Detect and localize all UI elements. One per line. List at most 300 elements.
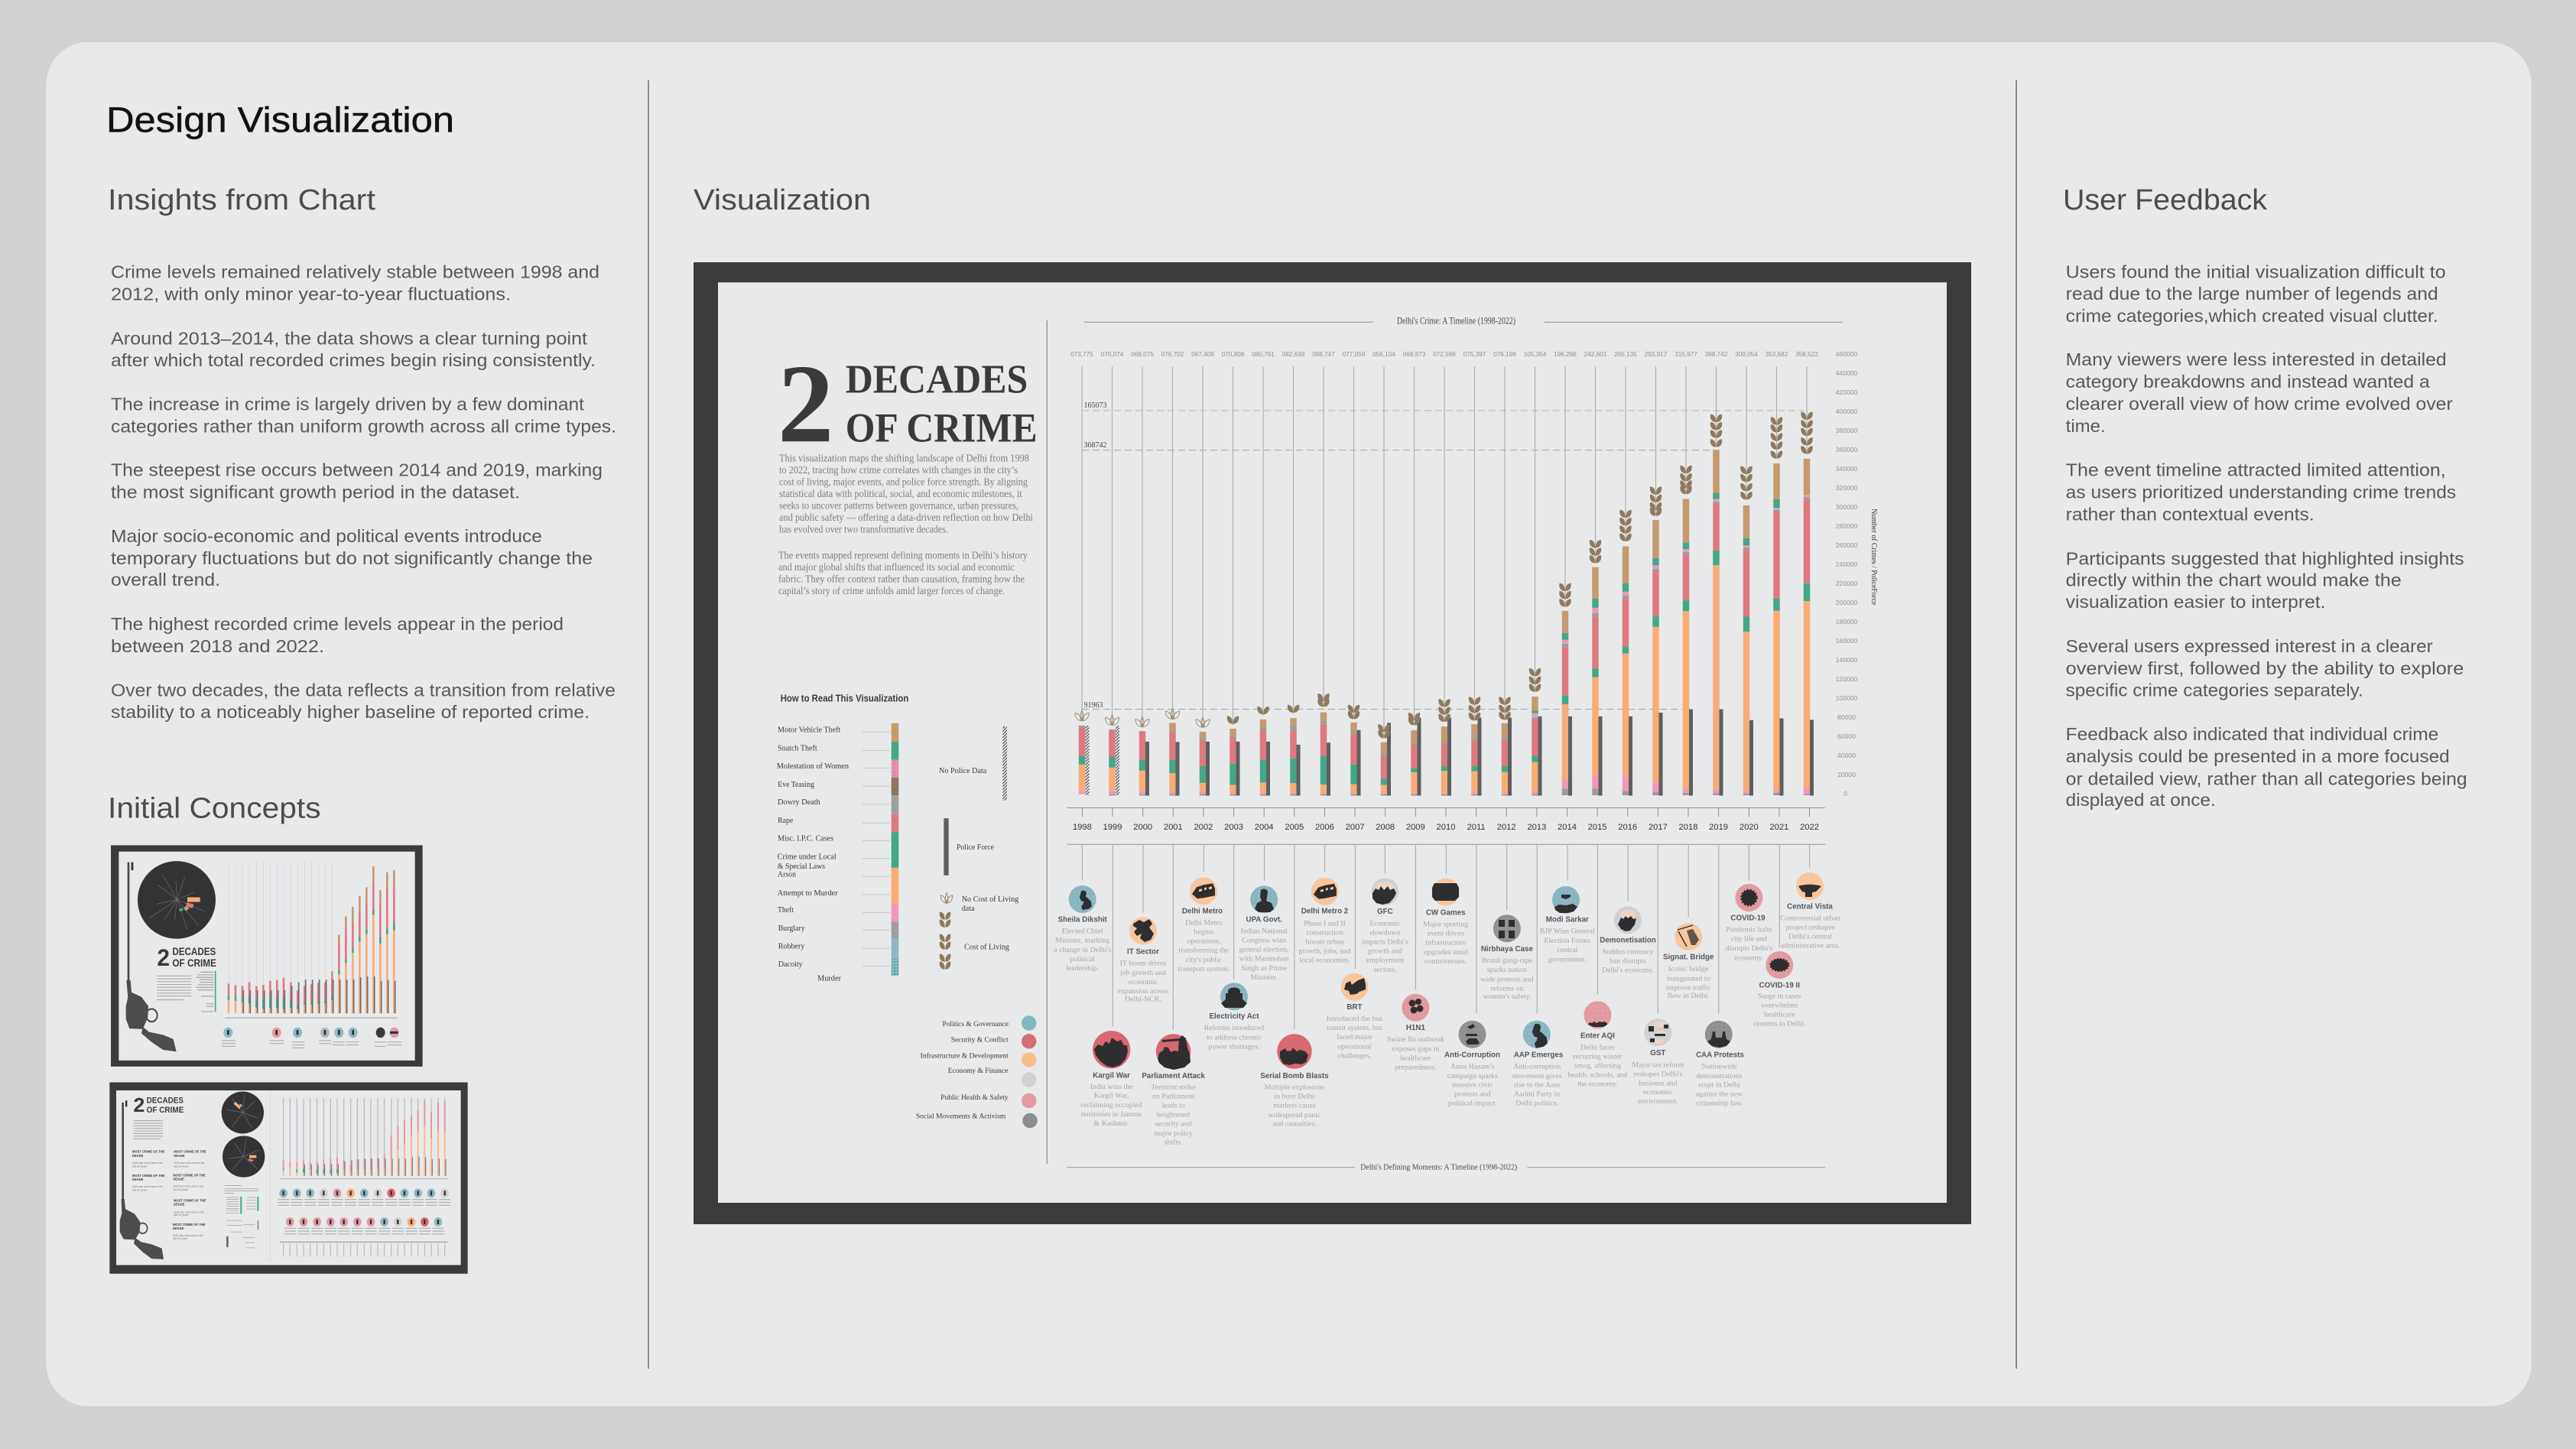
- event: Signature Bridge: flow in Delhi.: [1668, 992, 1710, 1000]
- event: UPA Govt.: Congress wins: [1242, 937, 1286, 945]
- event: Demonetisation: [1600, 844, 1656, 975]
- event: Parliament Attack: [1142, 844, 1205, 1147]
- text block: feedback: Many viewers were less interested in detailed: [2066, 349, 2447, 369]
- event: Sheila Dikshit: a change in Delhi's: [1054, 946, 1111, 954]
- event: Delhi Metro 2: Phase I and II: [1304, 919, 1346, 928]
- text block: insights: overall trend.: [111, 570, 220, 590]
- event: Anti-Corruption: campaign sparks: [1447, 1072, 1498, 1080]
- chart: total crime labels: [1070, 351, 1818, 358]
- event: AAP Emerges: rise to the Aam: [1514, 1081, 1561, 1090]
- thumbnail: second concept: [109, 1082, 468, 1274]
- x axis: years: 2002: [1194, 823, 1213, 832]
- event: Anti-Corruption: protests and: [1454, 1090, 1491, 1099]
- event: CW Games: Major sporting: [1423, 921, 1468, 929]
- event: Delhi Metro 2: [1298, 844, 1351, 965]
- text block: introduction: to 2022, tracing how crime correlates with changes in the city’s: [779, 464, 1018, 476]
- event: Central Vista: administrative area.: [1781, 942, 1840, 950]
- event: Demonetisation: Sudden currency: [1603, 948, 1653, 957]
- chart: total crime labels: 368,742: [1705, 351, 1728, 358]
- thumbnail: second concept: 2020 saw most crime in the: [173, 1184, 204, 1188]
- event: Delhi Metro: Delhi Metro: [1182, 907, 1223, 915]
- event: Modi Sarkar: Election Forms: [1544, 937, 1590, 945]
- timeline: events: [1054, 844, 1840, 1147]
- heading: user feedback: User Feedback: [2063, 184, 2268, 216]
- thumbnail: first concept: 2: [157, 945, 170, 972]
- chart: y axis: 220000: [1836, 580, 1858, 587]
- text block: feedback: category breakdowns and instead wanted a: [2066, 372, 2431, 391]
- text block: feedback: analysis could be presented in a more focused: [2066, 746, 2450, 766]
- chart: total crime labels: 076,702: [1161, 351, 1184, 358]
- event: GFC: growth and: [1368, 947, 1402, 956]
- chart: total crime labels: 077,059: [1343, 351, 1366, 358]
- thumbnail: second concept: 2020 saw most crime in the: [174, 1210, 204, 1213]
- infographic title: 2: [778, 341, 833, 466]
- legend: no police data: [939, 726, 1007, 801]
- event: Signature Bridge: [1663, 844, 1714, 1000]
- x axis: years: 2011: [1467, 823, 1486, 832]
- event: Sheila Dikshit: Minister, marking: [1055, 937, 1109, 945]
- text block: introduction: capital’s story of crime unfolds amid larger forces of change.: [778, 585, 1005, 596]
- legend labels: crime categories: Arson: [778, 871, 797, 879]
- event: Anti-Corruption: massive civic: [1452, 1081, 1493, 1090]
- legend labels: crime categories: Motor Vehicle Theft: [778, 726, 840, 735]
- chart: y axis: 160000: [1836, 637, 1858, 645]
- text block: feedback: specific crime categories separately.: [2066, 681, 2363, 700]
- heading: initial concepts: Initial Concepts: [108, 793, 321, 825]
- chart: reference lines: [1082, 401, 1804, 710]
- chart: total crime labels: 242,601: [1584, 351, 1607, 358]
- chart: total crime labels: 070,074: [1101, 351, 1124, 358]
- chart: reference lines: 368742: [1084, 441, 1107, 450]
- legend: cost of living: [940, 912, 1010, 970]
- legend labels: crime categories: Dowry Death: [778, 798, 820, 807]
- legend labels: crime categories: & Special Laws: [778, 863, 825, 871]
- text block: insights: temporary fluctuations but do not significantly change the: [111, 548, 593, 568]
- event: GFC: sectors.: [1373, 966, 1396, 974]
- event: Kargil War: India wins the: [1090, 1083, 1133, 1091]
- event: COVID-19: economy.: [1734, 954, 1763, 962]
- chart: total crime labels: 072,596: [1433, 351, 1456, 358]
- text block: insights: after which total recorded crimes begin rising consistently.: [111, 350, 596, 370]
- thumbnail: second concept: DEADE: [132, 1154, 143, 1158]
- event: Enter AQI: Delhi faces: [1580, 1043, 1615, 1051]
- thumbnail: second concept: DEADE: [132, 1178, 143, 1181]
- event: Sheila Dikshit: political: [1070, 955, 1095, 963]
- text block: feedback: Users found the initial visualization difficult to: [2066, 262, 2446, 281]
- chart: reference lines: 165073: [1084, 401, 1107, 410]
- event: Electricity Act: Reforms introduced: [1204, 1024, 1264, 1032]
- text block: introduction: fabric. They offer context rather than causation, framing how the: [778, 573, 1025, 584]
- legend labels: crime categories: Eve Teasing: [778, 781, 815, 789]
- event: GST: [1632, 844, 1684, 1106]
- x axis: years: 2016: [1618, 823, 1637, 832]
- chart: y axis: 0: [1843, 790, 1847, 798]
- event: GFC: impacts Delhi's: [1362, 937, 1408, 946]
- thumbnail: second concept: MOST CRIME OF THE: [174, 1198, 206, 1203]
- infographic title: DECADES: [846, 357, 1028, 401]
- event: Delhi Metro 2: construction: [1306, 929, 1343, 937]
- event: Parliament Attack: Parliament Attack: [1142, 1072, 1205, 1080]
- event: UPA Govt.: UPA Govt.: [1246, 916, 1282, 924]
- thumbnail: second concept: DEADE: [173, 1226, 184, 1230]
- event: Anti-Corruption: political impact.: [1448, 1099, 1497, 1107]
- legend: event categories: Infrastructure & Development: [921, 1052, 1009, 1061]
- event: Delhi Metro 2: boosts urban: [1305, 937, 1344, 946]
- event: COVID-19 II: systems in Delhi.: [1753, 1020, 1805, 1028]
- x axis: years: 1999: [1103, 823, 1122, 832]
- legend: no cost of living: No Cost of Living: [962, 895, 1019, 904]
- chart: total crime labels: 080,761: [1252, 351, 1275, 358]
- thumbnail: second concept: MOST CRIME OF THE: [174, 1149, 206, 1154]
- text block: feedback: time.: [2066, 416, 2106, 436]
- event: GFC: [1362, 844, 1408, 974]
- event: Nirbhaya Case: women's safety.: [1483, 993, 1531, 1001]
- event: BRT: [1327, 844, 1382, 1060]
- thumbnail: second concept: MOST CRIME OF THE: [173, 1173, 206, 1178]
- event: BRT: BRT: [1346, 1003, 1362, 1012]
- event: CW Games: infrastructure: [1425, 939, 1467, 947]
- text block: introduction: and major global shifts that influenced its social and economic: [778, 561, 1015, 573]
- event: COVID-19 II: COVID-19 II: [1759, 982, 1800, 990]
- legend: how to read: [777, 693, 1038, 1128]
- legend labels: crime categories: Burglary: [778, 924, 805, 933]
- event: UPA Govt.: Minister.: [1251, 973, 1278, 982]
- thumbnail: second concept: DEADE: [174, 1154, 185, 1158]
- event: Nirbhaya Case: reforms on: [1490, 984, 1523, 993]
- event: IT Sector: IT Sector: [1127, 948, 1159, 957]
- event: AAP Emerges: Delhi politics.: [1515, 1099, 1558, 1107]
- event: H1N1: [1387, 844, 1444, 1071]
- chart: y axis: 200000: [1836, 599, 1858, 606]
- chart: reference lines: 91963: [1084, 701, 1103, 710]
- event: Serial Bomb Blasts: [1260, 844, 1329, 1129]
- thumbnail: second concept: last 20 years: [173, 1237, 188, 1240]
- text block: feedback: displayed at once.: [2066, 790, 2216, 810]
- legend: event categories: [916, 1015, 1038, 1128]
- event: AAP Emerges: Aadmi Party in: [1514, 1090, 1560, 1098]
- bars: no police data hatching: [1086, 726, 1119, 795]
- text block: insights: The steepest rise occurs between 2014 and 2019, marking: [111, 460, 603, 480]
- chart: y axis: 40000: [1837, 752, 1856, 759]
- text block: feedback: read due to the large number of legends and: [2066, 284, 2438, 304]
- chart: y axis: 420000: [1836, 388, 1858, 396]
- legend: no cost of living: [940, 893, 1019, 913]
- event: AAP Emerges: [1512, 844, 1564, 1107]
- event: Parliament Attack: Terrorist strike: [1151, 1084, 1196, 1092]
- text block: insights: categories rather than uniform growth across all crime types.: [111, 416, 616, 436]
- chart: total crime labels: 309,054: [1735, 351, 1758, 358]
- text block: insights: The increase in crime is largely driven by a few dominant: [111, 395, 584, 414]
- text block: insights: [111, 262, 616, 722]
- event: Electricity Act: Electricity Act: [1210, 1012, 1259, 1021]
- heading: visualization: Visualization: [694, 184, 871, 216]
- event: GST: Major tax reform: [1632, 1061, 1684, 1069]
- event: Delhi Metro: transforming the: [1179, 947, 1230, 955]
- bar segments: pink: [1082, 495, 1807, 794]
- text block: introduction: statistical data with political, social, and economic milestones, it: [779, 488, 1022, 499]
- legend labels: crime categories: Dacoity: [778, 960, 803, 969]
- legend: event categories: Economy & Finance: [948, 1067, 1008, 1075]
- legend labels: crime categories: Murder: [817, 975, 841, 983]
- event: Kargil War: territories in Jammu: [1081, 1110, 1142, 1119]
- chart: total crime labels: 068,075: [1131, 351, 1154, 358]
- event: Modi Sarkar: government.: [1548, 955, 1587, 963]
- chart: y axis: [1836, 350, 1858, 798]
- thumbnail: second concept: last 20 years: [174, 1213, 189, 1217]
- event: Delhi Metro 2: growth, jobs, and: [1298, 947, 1351, 956]
- x axis: years: 2004: [1255, 823, 1274, 832]
- event: Delhi Metro: operations,: [1187, 937, 1220, 946]
- event: Kargil War: Kargil War,: [1094, 1092, 1129, 1100]
- legend: event categories: Politics & Governance: [942, 1021, 1009, 1028]
- event: AAP Emerges: Anti-corruption: [1513, 1063, 1561, 1071]
- event: CAA Protests: erupt in Delhi: [1698, 1081, 1740, 1090]
- event: UPA Govt.: general election,: [1239, 946, 1289, 954]
- chart: y axis: 240000: [1836, 560, 1858, 568]
- text block: feedback: clearer overall view of how crime evolved over: [2066, 394, 2453, 414]
- event: CAA Protests: against the new: [1696, 1090, 1743, 1099]
- event: Nirbhaya Case: sparks nation: [1487, 966, 1527, 974]
- event: Anti-Corruption: Anna Hazare's: [1450, 1063, 1495, 1071]
- chart: y axis: 460000: [1836, 350, 1858, 358]
- event: BRT: faced major: [1337, 1033, 1373, 1041]
- event: COVID-19 II: healthcare: [1764, 1011, 1795, 1019]
- event: CAA Protests: [1696, 844, 1744, 1107]
- chart: y axis: 100000: [1836, 694, 1858, 702]
- x axis: years: 2015: [1588, 823, 1607, 832]
- panel: right column: [2063, 184, 2467, 810]
- event: Demonetisation: ban disrupts: [1610, 957, 1646, 966]
- chart: y axis: 60000: [1837, 733, 1856, 740]
- event: Serial Bomb Blasts: Serial Bomb Blasts: [1260, 1072, 1329, 1080]
- text block: introduction: This visualization maps the shifting landscape of Delhi from 1998: [779, 452, 1029, 463]
- text block: insights: 2012, with only minor year-to-year fluctuations.: [111, 284, 511, 304]
- event: Signature Bridge: inaugurated to: [1667, 974, 1710, 983]
- event: H1N1: preparedness.: [1395, 1063, 1436, 1071]
- event: COVID-19: Pandemic halts: [1726, 926, 1772, 934]
- x axis: years: 2012: [1497, 823, 1516, 832]
- event: Electricity Act: to address chronic: [1207, 1033, 1262, 1041]
- chart: y axis: 120000: [1836, 675, 1858, 683]
- bar segments: gray: [1082, 497, 1807, 795]
- event: Electricity Act: [1204, 844, 1264, 1051]
- x axis: years: 2000: [1133, 823, 1152, 832]
- event: GST: business and: [1639, 1080, 1677, 1088]
- infographic title: [778, 341, 1038, 466]
- chart: total crime labels: 105,354: [1524, 351, 1547, 358]
- text block: feedback: [2066, 262, 2467, 810]
- event: GST: reshapes Delhi's: [1633, 1070, 1682, 1078]
- event: UPA Govt.: [1239, 844, 1289, 982]
- icons: cost of living wheat: [1227, 412, 1813, 738]
- text block: introduction: has evolved over two transformative decades.: [779, 524, 948, 535]
- title: Design Visualization: [106, 100, 454, 140]
- event: Signature Bridge: improve traffic: [1666, 983, 1711, 992]
- event: IT Sector: expansion across: [1117, 987, 1169, 996]
- thumbnail: first concept: DECADES: [172, 945, 216, 957]
- chart: y axis: 180000: [1836, 618, 1858, 625]
- legend heading: How to Read This Visualization: [781, 693, 908, 703]
- chart: y axis: 320000: [1836, 484, 1858, 492]
- chart: total crime labels: 076,198: [1493, 351, 1516, 358]
- thumbnail: second concept: MOST CRIME OF THE: [132, 1149, 164, 1154]
- event: COVID-19: city life and: [1731, 935, 1767, 944]
- thumbnail: second concept: last 20 years: [132, 1188, 148, 1191]
- text block: feedback: visualization easier to interpret.: [2066, 592, 2326, 612]
- event: GST: environment.: [1638, 1097, 1678, 1106]
- event: Nirbhaya Case: wide protests and: [1480, 975, 1534, 983]
- event: Serial Bomb Blasts: Multiple explosions: [1265, 1084, 1324, 1092]
- x axis: years: 2019: [1709, 823, 1728, 832]
- event: Serial Bomb Blasts: widespread panic: [1268, 1111, 1321, 1119]
- bar segments: orange: [1082, 565, 1807, 793]
- event: Nirbhaya Case: [1480, 844, 1534, 1001]
- event: IT Sector: IT boom drives: [1120, 960, 1167, 968]
- event: Central Vista: project reshapes: [1786, 923, 1835, 931]
- event: BRT: challenges.: [1337, 1051, 1371, 1060]
- event: Delhi Metro: begins: [1194, 928, 1213, 937]
- event: CAA Protests: CAA Protests: [1696, 1051, 1744, 1060]
- text block: insights: Major socio-economic and political events introduce: [111, 526, 542, 546]
- text block: feedback: or detailed view, rather than all categories being: [2066, 769, 2467, 789]
- event: Enter AQI: health, schools, and: [1567, 1071, 1627, 1080]
- chart: total crime labels: 358,522: [1795, 351, 1818, 358]
- event: Central Vista: Central Vista: [1787, 902, 1833, 911]
- thumbnail: second concept: MOST CRIME OF THE: [132, 1174, 164, 1178]
- event: Anti-Corruption: [1444, 844, 1500, 1107]
- event: Enter AQI: recurring winter: [1573, 1053, 1623, 1061]
- event: BRT: transit system, but: [1327, 1024, 1382, 1032]
- thumbnail: second concept: last 20 years: [173, 1188, 188, 1191]
- x axis: years: 2013: [1527, 823, 1546, 832]
- event: UPA Govt.: Indian National: [1240, 928, 1288, 936]
- event: Kargil War: reclaiming occupied: [1080, 1101, 1142, 1109]
- thumbnail: second concept: MOST CRIME OF THE: [173, 1223, 205, 1226]
- event: Modi Sarkar: Modi Sarkar: [1546, 916, 1589, 924]
- chart: y axis: 440000: [1836, 369, 1858, 377]
- x axis: years: 2022: [1800, 823, 1819, 832]
- x axis: years: 2018: [1679, 823, 1697, 832]
- event: AAP Emerges: movement gives: [1512, 1072, 1562, 1080]
- legend labels: crime categories: Theft: [778, 906, 794, 915]
- event: GST: GST: [1650, 1049, 1665, 1058]
- event: Demonetisation: Demonetisation: [1600, 936, 1656, 944]
- event: Modi Sarkar: [1540, 844, 1595, 963]
- x axis: years: 2021: [1769, 823, 1788, 832]
- event: Central Vista: Controversial urban: [1780, 914, 1840, 922]
- x axis: years: 2001: [1164, 823, 1183, 832]
- text block: insights: The highest recorded crime levels appear in the period: [111, 614, 564, 634]
- text block: feedback: Participants suggested that highlighted insights: [2066, 548, 2464, 568]
- legend labels: crime categories: Robbery: [778, 942, 805, 951]
- thumbnail: second concept: last 20 years: [174, 1165, 189, 1168]
- text block: insights: stability to a noticeably higher baseline of reported crime.: [111, 702, 590, 722]
- legend: event categories: Security & Conflict: [951, 1036, 1009, 1045]
- text block: insights: Around 2013–2014, the data shows a clear turning point: [111, 329, 587, 349]
- event: Serial Bomb Blasts: and casualties.: [1272, 1120, 1317, 1129]
- bar segments: green: [1082, 492, 1807, 785]
- thumbnail: second concept: 2: [133, 1094, 145, 1117]
- bar segments: red: [1082, 500, 1807, 779]
- x axis: years: 2009: [1406, 823, 1425, 832]
- event: GST: economic: [1643, 1088, 1673, 1096]
- event: GFC: Economic: [1369, 919, 1401, 928]
- chart: total crime labels: 082,638: [1282, 351, 1305, 358]
- event: GFC: GFC: [1377, 908, 1393, 916]
- event: Kargil War: & Kashmir.: [1094, 1119, 1129, 1128]
- x axis: years: 2020: [1740, 823, 1759, 832]
- event: Parliament Attack: major policy: [1155, 1129, 1193, 1138]
- chart: total crime labels: 070,808: [1222, 351, 1245, 358]
- text block: introduction: cost of living, major events, and police force strength. By aligning: [779, 476, 1028, 487]
- event: Electricity Act: power shortages.: [1209, 1043, 1259, 1051]
- chart: total crime labels: 073,775: [1070, 351, 1093, 358]
- chart: total crime labels: 293,917: [1645, 351, 1668, 358]
- chart: y axis: 80000: [1837, 713, 1856, 721]
- event: Modi Sarkar: central: [1557, 946, 1577, 954]
- text block: introduction: seeks to uncover patterns between governance, urban pressures,: [779, 500, 1018, 511]
- text block: insights: between 2018 and 2022.: [111, 636, 324, 656]
- event: COVID-19 II: overwhelms: [1761, 1001, 1798, 1009]
- chart: y axis: 340000: [1836, 465, 1858, 473]
- text block: insights: the most significant growth period in the dataset.: [111, 482, 520, 502]
- legend labels: crime categories: Misc. I.P.C. Cases: [778, 835, 833, 843]
- x axis: years: 2010: [1437, 823, 1455, 832]
- text block: feedback: Several users expressed interest in a clearer: [2066, 636, 2433, 656]
- event: Modi Sarkar: BJP Wins General: [1540, 928, 1595, 936]
- event: CAA Protests: citizenship law.: [1696, 1099, 1743, 1107]
- chart: y axis: 380000: [1836, 427, 1858, 434]
- bar chart: crimes and police force by year: [1075, 366, 1813, 795]
- legend: no police data: No Police Data: [939, 767, 987, 775]
- event: Kargil War: [1080, 844, 1142, 1128]
- bars: police force: [1147, 710, 1812, 795]
- event: Nirbhaya Case: Brutal gang-rape: [1482, 957, 1533, 965]
- thumbnail: first concept: OF CRIME: [172, 957, 216, 969]
- event: Signature Bridge: Signat. Bridge: [1663, 954, 1714, 962]
- event: CW Games: controversies.: [1424, 957, 1467, 966]
- panel: left column: [106, 100, 616, 1274]
- event: Enter AQI: smog, affecting: [1574, 1062, 1621, 1071]
- chart: total crime labels: 075,397: [1463, 351, 1486, 358]
- chart: total crime labels: 353,682: [1766, 351, 1788, 358]
- chart: y axis: 400000: [1836, 408, 1858, 415]
- legend labels: crime categories: Snatch Theft: [778, 744, 817, 752]
- chart: y axis: 360000: [1836, 446, 1858, 453]
- text block: feedback: as users prioritized understanding crime trends: [2066, 482, 2456, 502]
- event: Serial Bomb Blasts: in busy Delhi: [1274, 1093, 1315, 1101]
- event: COVID-19 II: [1753, 844, 1805, 1028]
- event: CW Games: [1423, 844, 1468, 966]
- event: Enter AQI: the economy.: [1577, 1080, 1618, 1089]
- event: Delhi Metro: Delhi Metro: [1185, 918, 1223, 927]
- event: Demonetisation: Delhi's economy.: [1602, 967, 1654, 975]
- legend labels: crime categories: Crime under Local: [778, 853, 836, 861]
- x axis: years: 2014: [1558, 823, 1577, 832]
- x axis: years: 2008: [1376, 823, 1395, 832]
- event: H1N1: healthcare: [1400, 1054, 1431, 1062]
- chart heading: Delhi's Crime: A Timeline (1998-2022): [1397, 315, 1515, 326]
- heading: insights from chart: Insights from Chart: [108, 184, 375, 216]
- text block: introduction: The events mapped represent defining moments in Delhi’s history: [778, 549, 1028, 560]
- thumbnail: second concept: DEADE: [173, 1177, 184, 1181]
- text block: insights: Over two decades, the data reflects a transition from relative: [111, 680, 616, 700]
- event: COVID-19: COVID-19: [1730, 914, 1766, 922]
- text block: feedback: overview first, followed by the ability to explore: [2066, 658, 2464, 678]
- event: Sheila Dikshit: leadership.: [1066, 964, 1099, 973]
- x axis: years: 1998: [1073, 823, 1092, 832]
- thumbnail: second concept: 2020 saw most crime in the: [173, 1234, 203, 1237]
